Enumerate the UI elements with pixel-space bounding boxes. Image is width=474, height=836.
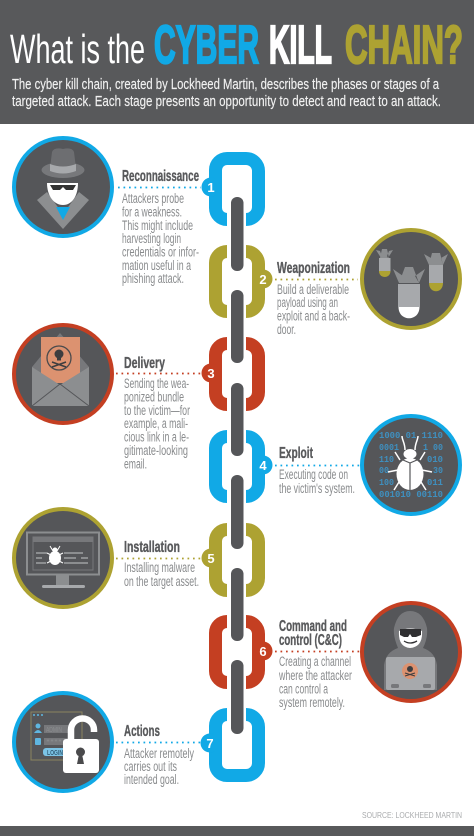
link 1 xyxy=(202,158,258,220)
link 6: 6 xyxy=(259,644,267,659)
icon: envelope xyxy=(14,325,112,423)
dotted connector xyxy=(118,186,201,188)
heading: Actions xyxy=(124,723,160,740)
body text: Executing code on xyxy=(279,467,348,482)
step 3: delivery xyxy=(14,325,201,472)
heading: Reconnaissance xyxy=(122,168,199,185)
link 6 xyxy=(216,622,272,682)
icon: login and open padlock: **** xyxy=(46,739,62,746)
body text xyxy=(122,191,199,286)
body text: door. xyxy=(277,322,296,337)
icon: bug on binary: 0001 xyxy=(379,442,399,453)
body text: credentials or infor- xyxy=(122,244,199,260)
body text: Sending the wea- xyxy=(124,376,189,391)
body text: Creating a channel xyxy=(279,654,351,669)
dotted connector xyxy=(275,650,360,652)
icon: infected monitor xyxy=(14,509,112,607)
icon: bug on binary: 1 00 xyxy=(423,442,443,453)
icon: bug on binary: 1000 01 1110 xyxy=(379,430,443,441)
icon: hooded hacker xyxy=(362,603,460,701)
title xyxy=(10,15,463,75)
icon: bug on binary: 110 xyxy=(379,454,394,465)
body text: email. xyxy=(124,456,147,472)
body text xyxy=(277,282,350,337)
icon: bug on binary: 00 xyxy=(379,465,389,476)
step 7: actions xyxy=(14,693,201,791)
body text: to the victim—for xyxy=(124,403,190,418)
icon: spy xyxy=(14,138,112,236)
body text: exploit and a back- xyxy=(277,308,350,324)
body text: harvesting login xyxy=(122,231,181,246)
body text: gitimate-looking xyxy=(124,443,188,458)
icon: login and open padlock: ADMIN xyxy=(46,727,62,734)
body text: Installing malware xyxy=(124,560,195,575)
icon: bug on binary: 011 xyxy=(427,477,443,488)
title: What is the xyxy=(10,26,145,72)
step 4: exploit xyxy=(275,416,460,514)
body text xyxy=(278,654,352,710)
body text: Attackers probe xyxy=(122,191,184,206)
step 6: command and control xyxy=(275,603,460,710)
body text: cious link in a le- xyxy=(124,430,189,444)
body text xyxy=(279,467,355,496)
icon: login and open padlock xyxy=(14,693,112,791)
intro text xyxy=(12,76,441,110)
body text: Build a deliverable xyxy=(277,282,349,297)
body text: system remotely. xyxy=(279,695,345,710)
body text: Attacker remotely xyxy=(124,746,194,761)
body text: intended goal. xyxy=(124,772,179,787)
link 2 xyxy=(216,252,272,312)
body text xyxy=(124,376,190,472)
icon: bug on binary: 100 xyxy=(379,477,394,488)
icon: bug on binary: 001010 00110 xyxy=(379,489,443,500)
body text: ponized bundle xyxy=(124,390,184,404)
title: CYBER xyxy=(154,15,259,75)
link 3: 3 xyxy=(207,366,215,381)
body text: mation useful in a xyxy=(122,258,191,273)
heading: control (C&C) xyxy=(279,632,342,649)
link 7: 7 xyxy=(206,736,214,751)
dotted connector xyxy=(116,558,201,560)
link 2: 2 xyxy=(259,272,267,287)
body text: carries out its xyxy=(124,759,177,774)
body text: can control a xyxy=(279,682,328,696)
body text: the victim's system. xyxy=(279,481,355,496)
icon: bug on binary: 30 xyxy=(433,465,443,476)
link 4 xyxy=(216,436,272,496)
heading: Delivery xyxy=(124,355,165,372)
dark connector links xyxy=(231,197,244,734)
body text xyxy=(124,746,194,787)
icon: bug on binary: 010 xyxy=(427,454,443,465)
link 3 xyxy=(202,344,258,404)
body text: where the attacker xyxy=(278,668,352,683)
step 5: installation xyxy=(14,509,201,607)
link 1: 1 xyxy=(207,180,215,195)
body text: for a weakness. xyxy=(122,204,182,220)
heading: Installation xyxy=(124,539,180,556)
link 5 xyxy=(202,530,258,590)
heading xyxy=(279,618,347,649)
body text: payload using an xyxy=(277,295,338,310)
body text: on the target asset. xyxy=(124,574,199,589)
body text xyxy=(124,560,199,589)
dotted connector xyxy=(116,372,201,374)
header banner xyxy=(0,0,474,124)
heading: Exploit xyxy=(279,445,313,462)
body text: example, a mali- xyxy=(124,416,188,431)
link 7 xyxy=(200,714,258,776)
dotted connector xyxy=(275,278,358,280)
step 2: weaponization xyxy=(275,230,460,337)
chain xyxy=(200,158,272,776)
dotted connector xyxy=(116,742,201,744)
step 1: reconnaissance xyxy=(14,138,201,286)
footer bar xyxy=(0,826,474,836)
link 4: 4 xyxy=(259,458,267,473)
body text: phishing attack. xyxy=(122,271,184,286)
icon: login and open padlock: LOGIN xyxy=(47,750,63,757)
heading: Command and xyxy=(279,618,347,635)
icon: bombs xyxy=(362,230,460,328)
title: KILL xyxy=(269,15,332,75)
icon: bug on binary xyxy=(362,416,460,514)
body text: This might include xyxy=(122,218,193,233)
link 5: 5 xyxy=(207,551,215,566)
heading: Weaponization xyxy=(277,260,350,277)
dotted connector xyxy=(275,464,360,466)
